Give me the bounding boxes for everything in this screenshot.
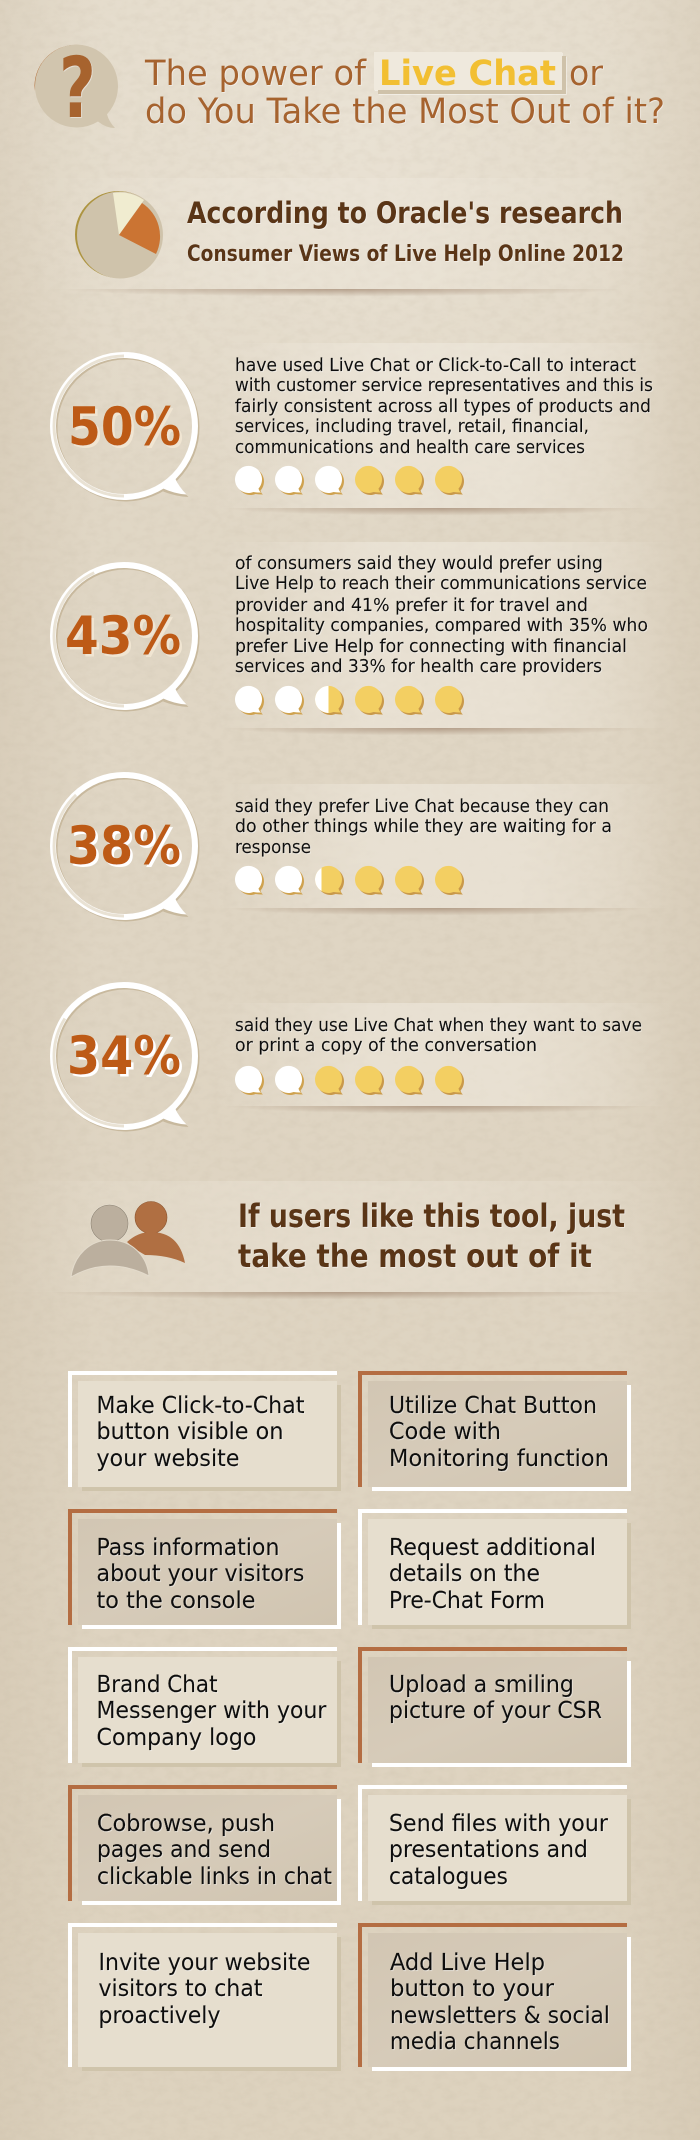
card: pre-chat form: details on the [389, 1559, 540, 1587]
card: brand chat messenger: Brand Chat [96, 1670, 218, 1698]
panel: research heading [30, 178, 650, 304]
icon row: chat dots 38% [235, 866, 464, 896]
icon: ring bubble 38% [53, 775, 196, 918]
card: brand chat messenger: Company logo [96, 1723, 256, 1751]
description 34%: or print a copy of the conversation [235, 1036, 537, 1056]
description 38%: do other things while they are waiting for a [235, 817, 612, 837]
icon row: chat dots 50% [235, 466, 464, 495]
description 43%: Live Help to reach their communications service [235, 574, 647, 594]
description 43%: hospitality companies, compared with 35% who [235, 616, 648, 636]
card: invite visitors: proactively [98, 2001, 221, 2029]
card: send files: presentations and [389, 1835, 588, 1863]
percentage 50%: 50% [68, 397, 181, 458]
card: send files [358, 1785, 631, 1905]
description 50%: with customer service representatives and this is [235, 376, 653, 396]
icon: question speech bubble [34, 39, 118, 137]
description 43% [235, 554, 648, 677]
card: invite visitors [68, 1923, 341, 2071]
percentage 43%: 43% [65, 606, 181, 667]
card: add live help: button to your [390, 1974, 554, 2002]
percentage 38%: 38% [67, 816, 181, 877]
card: pre-chat form [358, 1509, 631, 1629]
card: pass information: Pass information [96, 1533, 280, 1561]
icon: ring bubble 50% [53, 355, 196, 498]
card: smiling picture: picture of your CSR [389, 1696, 602, 1724]
card: smiling picture: Upload a smiling [389, 1670, 574, 1698]
card: chat button code: Code with [389, 1417, 501, 1445]
heading: title: Live Chat [379, 54, 556, 94]
description 43%: services and 33% for health care providers [235, 657, 602, 677]
icon row: chat dots 34% [235, 1066, 464, 1095]
card: cobrowse: Cobrowse, push [97, 1809, 275, 1837]
title block [34, 39, 665, 137]
icon row: chat dots 43% [235, 686, 464, 716]
description 43%: prefer Live Help for connecting with financial [235, 637, 627, 657]
heading: title [144, 52, 665, 132]
icon: two users [71, 1202, 185, 1277]
card: cobrowse [68, 1785, 341, 1905]
card: click-to-chat button: button visible on [96, 1417, 284, 1445]
panel: users section heading [0, 1181, 700, 1307]
panel: stat 50% [53, 343, 675, 523]
card: add live help: Add Live Help [390, 1948, 545, 1976]
card: add live help [358, 1923, 631, 2071]
heading: according to Oracle: According to Oracle's research [187, 196, 623, 230]
card: send files: catalogues [389, 1862, 508, 1890]
description 38% [235, 797, 612, 858]
card: brand chat messenger: Messenger with your [96, 1696, 327, 1724]
description 50%: services, including travel, retail, financial, [235, 417, 589, 437]
card: pass information: about your visitors [96, 1559, 304, 1587]
card: pass information [68, 1509, 341, 1629]
description 50%: fairly consistent across all types of products and [235, 397, 651, 417]
card: chat button code [358, 1371, 631, 1491]
icon: ring bubble 43% [53, 565, 196, 708]
description 50% [235, 356, 653, 458]
icon: ring bubble 34% [53, 985, 196, 1128]
card: click-to-chat button: your website [96, 1444, 240, 1472]
card: pre-chat form: Pre-Chat Form [389, 1586, 545, 1614]
description 50%: have used Live Chat or Click-to-Call to interact [235, 356, 636, 376]
card: chat button code: Monitoring function [389, 1444, 609, 1472]
panel: stat 34% [53, 985, 675, 1128]
panel: stat 38% [53, 775, 675, 923]
card: smiling picture [358, 1647, 631, 1767]
heading: if users like this tool: If users like this tool, just [238, 1197, 625, 1235]
card: chat button code: Utilize Chat Button [389, 1391, 597, 1419]
card: click-to-chat button [68, 1371, 341, 1491]
description 38%: response [235, 838, 311, 858]
panel: stat 43% [53, 542, 675, 743]
card: invite visitors: visitors to chat [98, 1974, 262, 2002]
icon: question speech bubble: ? [59, 39, 96, 137]
description 34%: said they use Live Chat when they want to save [235, 1016, 642, 1036]
description 50%: communications and health care services [235, 438, 585, 458]
heading: title: or [569, 54, 604, 94]
icon: pie chart [75, 191, 163, 278]
card: brand chat messenger [68, 1647, 341, 1767]
description 43%: provider and 41% prefer it for travel and [235, 596, 588, 616]
card: invite visitors: Invite your website [98, 1948, 310, 1976]
percentage 34%: 34% [67, 1026, 181, 1087]
card: add live help: newsletters & social [390, 2001, 610, 2029]
heading: title: The power of [144, 54, 367, 94]
description 43%: of consumers said they would prefer using [235, 554, 603, 574]
heading: if users like this tool: take the most out of it [238, 1237, 592, 1275]
card: send files: Send files with your [389, 1809, 608, 1837]
subheading: Consumer Views of Live Help Online 2012 [187, 242, 624, 267]
description 38%: said they prefer Live Chat because they can [235, 797, 609, 817]
card: pass information: to the console [96, 1586, 256, 1614]
card: pre-chat form: Request additional [389, 1533, 596, 1561]
card: add live help: media channels [390, 2027, 560, 2055]
card: cobrowse: pages and send [97, 1835, 271, 1863]
description 34% [235, 1016, 642, 1056]
card: cobrowse: clickable links in chat [97, 1862, 332, 1890]
heading: title: do You Take the Most Out of it? [145, 92, 665, 132]
card: click-to-chat button: Make Click-to-Chat [96, 1391, 304, 1419]
heading: if users like this tool [238, 1197, 625, 1275]
